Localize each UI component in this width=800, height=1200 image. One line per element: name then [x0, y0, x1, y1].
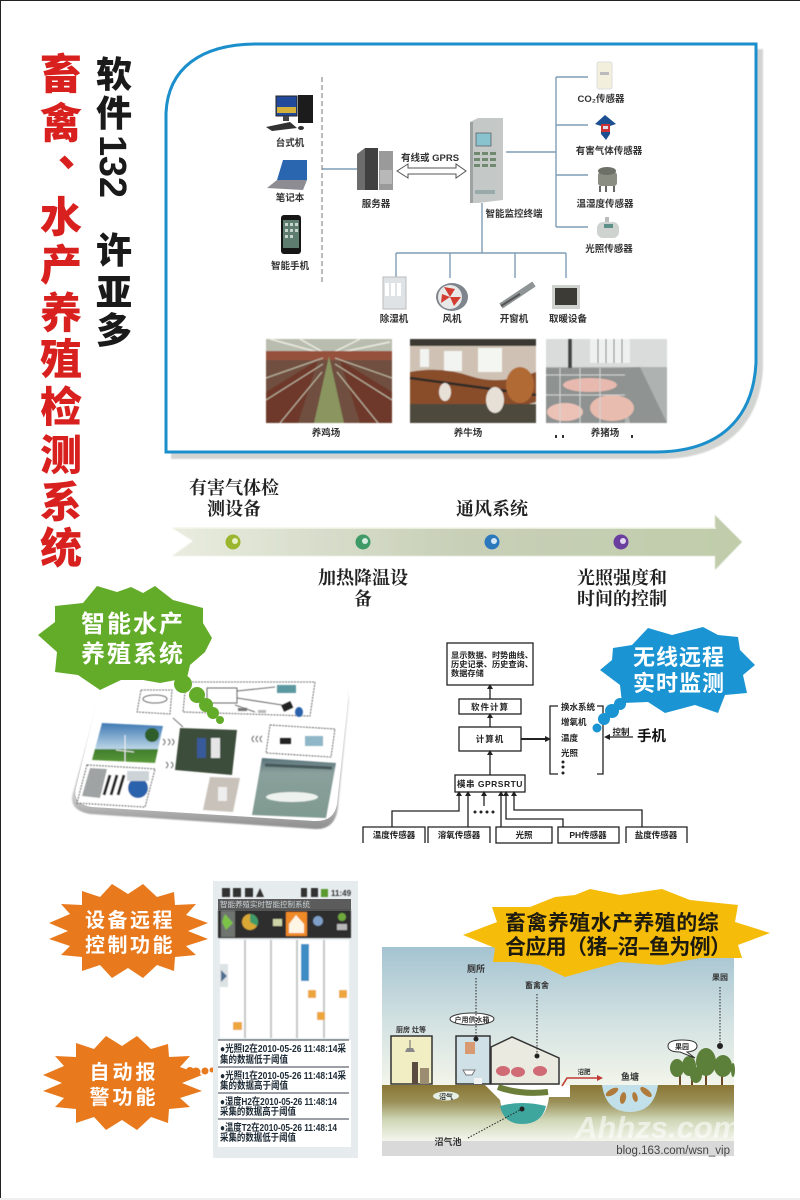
- orchard: 果园: [675, 1043, 689, 1051]
- bracket: controlled systems: 光照: [561, 748, 579, 758]
- source credit: blog.163.com/wsn_vip: [616, 1145, 730, 1157]
- box: serial GPRS RTU: [455, 775, 525, 792]
- arrows: sensors to RTU: [392, 791, 642, 827]
- title: vertical red heading: 、: [58, 128, 100, 175]
- label: dehumidifier: 除湿机: [380, 313, 409, 325]
- label: server: 服务器: [362, 198, 391, 210]
- label: desktop: 台式机: [276, 137, 305, 149]
- bracket: controlled systems: [550, 702, 603, 774]
- box: computer: [459, 727, 521, 751]
- box: software computing: 软件计算: [471, 702, 509, 712]
- subtitle: vertical black author line: 132: [91, 135, 133, 198]
- specks under pig farm: [555, 435, 633, 438]
- callout: integrated application burst: 合应用（猪–沼–鱼为例）: [505, 935, 731, 959]
- app icon bar: [218, 910, 351, 938]
- title: vertical red heading: 测: [40, 432, 82, 479]
- box: sensor light: 光照: [515, 830, 533, 840]
- box: sensor salinity: [626, 827, 687, 843]
- box: sensor salinity: 盐度传感器: [635, 830, 678, 840]
- photo: aerated pond: [252, 758, 336, 818]
- title: vertical red heading: 殖: [40, 336, 82, 383]
- icon: fan: [436, 283, 468, 311]
- panel: aquaculture system slab: [72, 680, 349, 829]
- icon: CO2 sensor: [597, 62, 612, 89]
- status bar: 11:49: [331, 889, 352, 898]
- fish pond: [602, 1085, 658, 1112]
- app title bar: 智能养殖实时智能控制系统: [220, 899, 310, 909]
- building: toilet: [456, 1036, 490, 1084]
- callout: smart aquaculture burst: 智能水产: [81, 611, 185, 638]
- arrow: wired or GPRS link: [397, 164, 466, 178]
- callout: wireless remote monitoring burst: 实时监测: [633, 671, 725, 696]
- box: sensor PH: [558, 827, 619, 843]
- photo: on-site equipment: [203, 777, 240, 812]
- label: CO2 sensor: CO₂传感器: [578, 93, 625, 105]
- box: sensor PH: PH传感器: [569, 830, 607, 840]
- icon: monitoring cabinet: [470, 118, 503, 203]
- flow chart: wireless monitoring: [363, 643, 687, 843]
- building: kitchen: [391, 1025, 432, 1084]
- label: cattle farm: 养牛场: [454, 427, 483, 439]
- title: vertical red heading: 产: [40, 242, 82, 289]
- callout: integrated application burst: [463, 889, 770, 977]
- label: window opener: 开窗机: [500, 313, 529, 325]
- arrow: slurry to pond: [562, 1067, 603, 1086]
- timeline label: heating and cooling: 备: [354, 585, 372, 611]
- bracket: controlled systems: 温度: [561, 733, 579, 743]
- callout: wireless remote monitoring burst: [592, 627, 755, 732]
- leader: toilet: [474, 978, 478, 1042]
- callout: smart aquaculture burst: [38, 586, 224, 724]
- icon: desktop computer: [266, 95, 313, 131]
- box: serial GPRS RTU: 模串 GPRSRTU: [457, 779, 523, 789]
- alert message list: 集的数据高于阈值: [220, 1079, 288, 1092]
- photo: pig farm: [546, 339, 667, 423]
- divider: client devices: [321, 77, 323, 282]
- watermark: Ahhzs.com: [574, 1110, 740, 1145]
- icon: window opener: [501, 284, 534, 306]
- arrow: phone control: 控制: [612, 727, 630, 737]
- title: vertical red heading: 系: [40, 479, 82, 526]
- title: vertical red heading: 检: [40, 384, 82, 431]
- timeline label: harmful gas detection: 有害气体检: [189, 474, 279, 500]
- dot: green stage: [226, 534, 240, 550]
- photo: cattle farm: [410, 339, 536, 423]
- biogas digester: [485, 1085, 570, 1124]
- photo: sensors: [77, 765, 155, 807]
- callout: device remote control burst: 控制功能: [85, 934, 175, 957]
- alert message list: ●温度T2在2010-05-26 11:48:14: [220, 1121, 337, 1134]
- box: sensor light: [496, 827, 552, 843]
- connection lines: [322, 77, 588, 278]
- title: vertical red heading: 统: [40, 525, 82, 572]
- alert message list: 采集的数据低于阈值: [220, 1131, 296, 1144]
- timeline label: light control: 光照强度和: [577, 564, 667, 590]
- alert grid: [220, 940, 349, 1038]
- icon: light sensor: [597, 217, 619, 238]
- alert message list: 采集的数据高于阈值: [220, 1105, 296, 1118]
- subtitle: vertical black author line: 件: [96, 93, 132, 134]
- title: vertical red heading: 禽: [40, 100, 82, 147]
- alert message list: ●光照I2在2010-05-26 11:48:14采: [220, 1042, 346, 1055]
- icon: temperature and humidity sensor: [598, 167, 617, 192]
- callout: integrated application burst: 畜禽养殖水产养殖的综: [505, 911, 719, 935]
- callout: automatic alarm burst: 警功能: [90, 1086, 158, 1109]
- title: vertical red heading: 畜: [40, 51, 82, 98]
- timeline label: heating and cooling: 加热降温设: [318, 564, 408, 590]
- box: sensor temperature: [363, 827, 425, 843]
- title: vertical red heading: 养: [40, 290, 82, 337]
- label: monitoring terminal: 智能监控终端: [485, 208, 543, 220]
- box: computer: 计算机: [476, 734, 504, 744]
- label: pig house: 畜禽舍: [525, 980, 549, 990]
- label: mobile phone: 手机: [637, 728, 666, 745]
- diagram: monitoring platform: [137, 682, 335, 768]
- icon: server: [357, 148, 393, 190]
- box: sensor dissolved oxygen: [428, 827, 490, 843]
- label: tank bubble: [450, 1013, 494, 1025]
- label: biogas bubble: [433, 1092, 459, 1101]
- panel: pig-biogas-fish scene: [382, 947, 740, 1157]
- icon: dehumidifier: [383, 277, 406, 309]
- box: display data: 显示数据、时势曲线、: [451, 650, 533, 660]
- box: software computing: [459, 699, 521, 714]
- timeline label: light control: 时间的控制: [577, 585, 667, 611]
- building: kitchen: 厨房 灶等: [396, 1025, 426, 1034]
- subtitle: vertical black author line: 亚: [96, 272, 132, 313]
- label: harmful gas sensor: 有害气体传感器: [576, 145, 643, 157]
- alert message list: 集的数据低于阈值: [220, 1053, 288, 1066]
- box: display data: 数据存储: [451, 668, 484, 678]
- leader: pig house: [534, 994, 540, 1058]
- arrow: process timeline: [172, 515, 742, 570]
- arrows: vertical chain: [487, 684, 493, 775]
- app title bar: [218, 899, 351, 910]
- label: smart phone: 智能手机: [271, 260, 309, 272]
- bracket: controlled systems: 增氧机: [561, 717, 587, 727]
- label: biogas bubble: 沼气: [439, 1092, 453, 1101]
- box: sensor temperature: 温度传感器: [373, 830, 416, 840]
- arrow: phone control: [604, 727, 633, 740]
- title: vertical red heading: 水: [40, 194, 82, 241]
- label: orchard: 果园: [712, 973, 728, 982]
- dot: blue stage: [484, 534, 500, 550]
- label: fan: 风机: [442, 313, 462, 325]
- building: pig house: [491, 1037, 559, 1084]
- label: notebook: 笔记本: [276, 192, 305, 204]
- label: link: 有线或 GPRS: [401, 152, 459, 164]
- box: display data: [447, 643, 533, 685]
- alert message list: ●湿度H2在2010-05-26 11:48:14: [220, 1095, 337, 1108]
- arrow: slurry to pond: 沼肥: [578, 1067, 591, 1076]
- orchard: [668, 1040, 735, 1085]
- callout: smart aquaculture burst: 养殖系统: [81, 641, 185, 668]
- dot: teal stage: [356, 534, 370, 550]
- status bar: [222, 888, 352, 898]
- callout: device remote control burst: [49, 884, 208, 978]
- callout: device remote control burst: 设备远程: [85, 909, 175, 932]
- icon: smartphone: [281, 215, 301, 254]
- icon: heater: [552, 285, 580, 309]
- label: temperature sensor: 温湿度传感器: [576, 198, 634, 210]
- timeline label: ventilation: 通风系统: [456, 495, 529, 521]
- bracket: controlled systems: 换水系统: [561, 702, 596, 712]
- alert message list: [218, 1040, 349, 1144]
- photo: buoy station: [175, 728, 237, 775]
- photo: chicken farm: [266, 339, 392, 423]
- label: fish pond: 鱼塘: [621, 1071, 639, 1082]
- label: toilet: 厕所: [467, 963, 485, 974]
- subtitle: vertical black author line: 软: [96, 54, 132, 95]
- label: light sensor: 光照传感器: [585, 243, 633, 255]
- label: digester: 沼气池: [434, 1136, 462, 1147]
- label: chicken farm: 养鸡场: [312, 427, 341, 439]
- leader: digester: [468, 1110, 520, 1138]
- label: pig farm: 养猪场: [591, 427, 620, 439]
- timeline label: harmful gas detection: 测设备: [207, 495, 261, 521]
- title: vertical red heading: [40, 51, 100, 572]
- subtitle: vertical black author line: 许: [96, 230, 132, 271]
- subtitle: vertical black author line: [91, 54, 133, 351]
- arrow: computer to systems: [521, 736, 551, 742]
- leader: orchard: [717, 987, 723, 1049]
- callout: automatic alarm burst: 自动报: [90, 1061, 158, 1084]
- dot: purple stage: [614, 534, 628, 550]
- box: display data: 历史记录、历史查询、: [451, 659, 533, 669]
- box: sensor dissolved oxygen: 溶氧传感器: [438, 830, 481, 840]
- icon: harmful gas sensor: [595, 115, 616, 140]
- icon: laptop: [267, 160, 307, 190]
- subtitle: vertical black author line: 多: [96, 310, 132, 351]
- photo: weather station: [92, 723, 163, 763]
- label: heater: 取暖设备: [549, 313, 587, 325]
- callout: wireless remote monitoring burst: 无线远程: [633, 645, 725, 670]
- callout: automatic alarm burst: [43, 1036, 214, 1130]
- alert message list: ●光照I1在2010-05-26 11:48:14采: [220, 1069, 346, 1082]
- panel: phone alarm screenshot: [213, 881, 358, 1158]
- panel: monitoring system architecture: [166, 44, 763, 459]
- label: tank bubble: 户用供水箱: [454, 1015, 490, 1024]
